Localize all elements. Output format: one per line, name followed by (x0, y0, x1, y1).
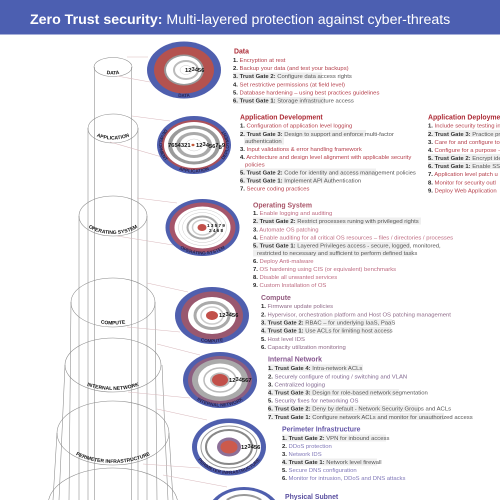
disc: perimeter infrastructure: 3 (247, 444, 251, 450)
text panel: data: 1. Encryption at rest (233, 58, 286, 64)
text panel: internal network: 4. Trust Gate 3: Design for role-based network segmentation (268, 390, 428, 396)
disc: data: 12 (185, 68, 191, 74)
cylinder layer labels: PERIMETER INFRASTRUCTURE (76, 452, 150, 463)
disc: physical subnet (213, 487, 275, 500)
text panel: application deployment: 4. Configure for a purpose - (428, 148, 500, 154)
disc: perimeter infrastructure: 12 (241, 445, 247, 451)
text panel: application development (240, 114, 416, 192)
text panel: perimeter infrastructure: 1. Trust Gate 2: VPN for inbound access (282, 436, 389, 442)
text panel: internal network: 2. Securely configure of routing / switching and VLAN (268, 374, 407, 380)
text panel: application deployment: 9. Deploy Web Application (428, 188, 497, 194)
disc: data: 4 (195, 68, 199, 74)
title banner: Zero Trust security: Multi-layered protection against cyber-threats (30, 12, 450, 28)
text panel: application development: 2. Trust Gate 3: Design to support and enforce multi-factor (240, 132, 394, 138)
disc: compute: 56 (232, 313, 239, 319)
text panel: application development: 5. Trust Gate 2: Code for identity and access management policies (240, 170, 416, 176)
disc: application: 4 (206, 143, 210, 149)
disc: data: 56 (198, 68, 205, 74)
text panel: operating system: 7. OS hardening using CIS (or equivalent) benchmarks (253, 267, 396, 273)
disc: compute: COMPUTE (201, 338, 224, 342)
disc: perimeter infrastructure (192, 418, 266, 476)
text panel: perimeter infrastructure: 3. Network IDS (282, 452, 322, 458)
disc: application: 7 (215, 143, 219, 149)
text panel: data: 6. Trust Gate 1: Storage infrastructure access (233, 99, 354, 105)
text panel: perimeter infrastructure (282, 426, 405, 482)
text panel: operating system: 9. Custom Installation of OS (253, 283, 326, 289)
disc: application: DEPLOYMENT (221, 131, 229, 160)
text panel: perimeter infrastructure: 2. DDoS protection (282, 444, 332, 450)
cylinder layer labels: INTERNAL NETWORK (87, 382, 139, 390)
disc: operating system: 1 3 5 7 9 (207, 223, 225, 228)
disc: internal network: 12 (229, 378, 235, 384)
text panel: operating system (253, 202, 453, 289)
text panel: compute: 3. Trust Gate 2: RBAC – for underlying IaaS, PaaS (261, 320, 395, 326)
disc: data: DATA (178, 94, 190, 98)
cylinder layer labels: DATA (106, 70, 120, 74)
disc: perimeter infrastructure: 4 (251, 445, 255, 451)
disc: application: 6 (212, 144, 216, 150)
connector lines between cylinders and discs (110, 57, 227, 487)
text panel: application development: 1. Configuration of application level logging (240, 124, 352, 130)
text panel: application development: 3. Input validations & error handling framework (240, 147, 362, 153)
disc: operating system (166, 199, 240, 256)
text panel: application deployment: 1. Include security testing in (428, 124, 500, 130)
text panel: internal network: 7. Trust Gate 1: Configure network ACLs and monitor for unauthorized access (268, 415, 473, 421)
text panel: operating system: 2. Trust Gate 2: Restrict processes runing with privileged rights (253, 219, 419, 225)
text panel: application deployment: 8. Monitor for security outl (428, 180, 496, 186)
cylinder layer labels: COMPUTE (101, 320, 126, 324)
text panel: compute (261, 295, 451, 351)
disc: application: 9 (222, 143, 226, 149)
disc: internal network: INTERNAL NETWORK (197, 397, 243, 406)
text panel: internal network: 1. Trust Gate 4: Intra-network ACLs (268, 366, 362, 372)
cylinder layer labels: APPLICATION (96, 133, 130, 140)
disc: compute: 4 (229, 313, 233, 319)
text panel: perimeter infrastructure: 6. Monitor for intrusion, DDoS and DNS attacks (282, 476, 405, 482)
text panel: operating system: 8. Disable all unwanted services (253, 275, 337, 281)
text panel: application development: 4. Architecture and design level alignment with applicable security (240, 155, 411, 161)
disc: internal network: 4 (239, 378, 243, 384)
disc: application: DEVELOPMENT (158, 129, 168, 160)
text panel: application deployment: Application Deployme (428, 114, 500, 122)
text panel: operating system: 4. Enable auditing for all critical OS resources – files / directories / processes (253, 236, 453, 242)
text panel: application development: 6. Trust Gate 1: Implement API Authentication (240, 178, 361, 184)
disc: application: 5 (209, 144, 213, 150)
text panel: data: 3. Trust Gate 2: Configure data access rights (233, 74, 352, 80)
text panel: perimeter infrastructure: Perimeter Infrastructure (282, 426, 361, 434)
text panel: operating system: restricted to necessary and sufficient to perform defined tasks (257, 251, 417, 257)
text panel: compute: 2. Hypervisor, orchestration platform and Host OS patching management (261, 312, 451, 318)
disc: application: 12 (196, 143, 202, 149)
text panel: application deployment: 5. Trust Gate 2: Encrypt ide (428, 156, 500, 162)
text panel: operating system: 5. Trust Gate 1: Layered Privileges access - secure, logged, monitored, (253, 244, 441, 250)
text panel: compute: 1. Firmware update policies (261, 304, 333, 310)
text panel: application development: policies (245, 162, 265, 168)
cylinder layer labels: OPERATING SYSTEM (89, 224, 138, 234)
nested cylinders diagram (49, 58, 177, 500)
cylinder layer labels (76, 70, 150, 463)
text panel: data: 4. Set restrictive permissions (at field level) (233, 82, 345, 88)
text panel: operating system: 3. Automate OS patching (253, 228, 319, 234)
text panel: internal network: 6. Trust Gate 2: Deny by default - Network Security Groups and ACLs (268, 406, 451, 412)
text panel: data (233, 48, 379, 105)
disc: application: 8 (219, 145, 223, 151)
text panel: data: 5. Database hardening – using best practices guidelines (233, 90, 379, 96)
text panel: data: 2. Backup your data (and test your backups) (233, 66, 349, 72)
text panel: application development: Application Development (240, 114, 323, 122)
text panel: application development: 7. Secure coding practices (240, 186, 309, 192)
disc: data (147, 42, 221, 98)
disc: operating system: 2 4 6 8 (209, 228, 223, 233)
disc: application: 3 (202, 142, 206, 148)
text panel: application deployment: 2. Trust Gate 3: Practice pri (428, 132, 500, 138)
disc: application: APPLICATION (179, 166, 209, 172)
disc: application (157, 116, 231, 174)
text panel: compute: 5. Host level IDS (261, 337, 305, 343)
text panel: application deployment (428, 114, 500, 194)
disc: perimeter infrastructure: PERIMETER INFRASTRUCTURE (198, 458, 260, 474)
disc: application: 7654321 (168, 143, 191, 149)
text panel: application deployment: 3. Care for and configure to (428, 140, 500, 146)
text panel: internal network: 5. Security fixes for networking OS (268, 398, 358, 404)
disc: compute (175, 287, 249, 344)
text panel: perimeter infrastructure: 4. Trust Gate 1: Network level firewall (282, 460, 382, 466)
disc: compute: 12 (219, 313, 225, 319)
text panel: internal network (268, 356, 473, 421)
text panel: application deployment: 7. Application level patch u (428, 172, 498, 178)
disc: internal network: 567 (242, 378, 252, 384)
text panel: perimeter infrastructure: 5. Secure DNS configuration (282, 468, 357, 474)
text panel: internal network: Internal Network (268, 356, 322, 364)
text panel: application development: authentication (245, 139, 282, 145)
title banner (0, 0, 500, 34)
disc: compute: 3 (225, 312, 229, 318)
text panel: operating system: 6. Deploy Anti-malware (253, 259, 314, 265)
disc: internal network: 3 (235, 377, 239, 383)
text panel: compute: 4. Trust Gate 1: Use ACLs for limiting host access (261, 328, 393, 334)
text panel: operating system: 1. Enable logging and auditing (253, 211, 332, 217)
disc: perimeter infrastructure: 56 (254, 445, 261, 451)
text panel: data: Data (234, 48, 249, 56)
text panel: internal network: 3. Centralized logging (268, 382, 325, 388)
text panel: operating system: Operating System (253, 202, 312, 210)
disc: internal network (183, 352, 257, 408)
text panel: compute: Compute (261, 295, 291, 302)
disc: data: 3 (191, 67, 195, 73)
disc: operating system: OPERATING SYSTEM (180, 246, 225, 254)
text panel: compute: 6. Capacity utilization monitoring (261, 345, 346, 351)
